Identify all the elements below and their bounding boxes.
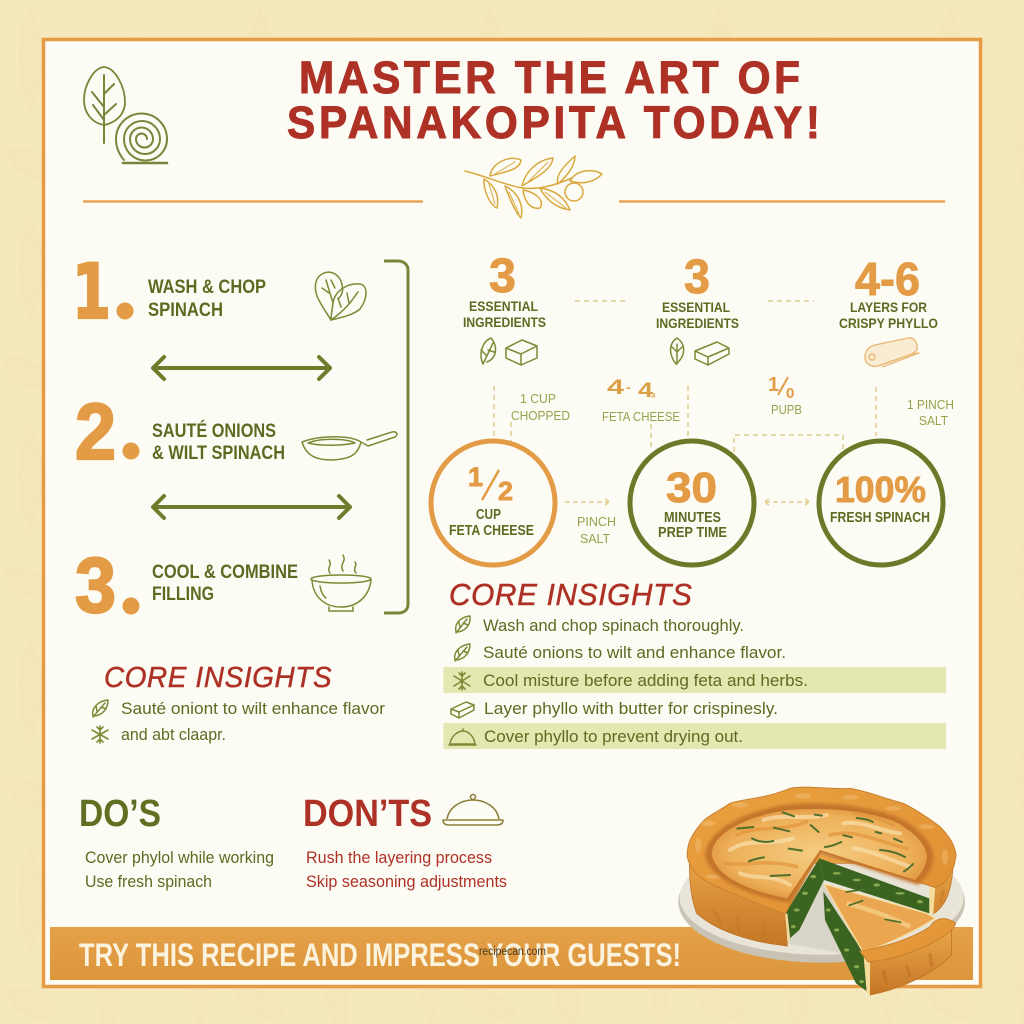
stat: 3 essential ingredients second <box>656 251 739 331</box>
heading: DON’TS <box>303 793 432 835</box>
icon: serving cloche <box>443 794 503 825</box>
insight text: and abt claapr. <box>121 725 226 744</box>
step 1: SPINACH <box>148 300 223 321</box>
stat: 4-6 layers: 4-6 <box>855 253 920 305</box>
insight icons <box>92 700 108 743</box>
arrow: step 2 to 3 <box>153 496 350 518</box>
step 1 <box>72 247 266 336</box>
pie body <box>689 853 953 946</box>
insight list: Layer phyllo with butter for crispinesly. <box>484 699 778 718</box>
garbled fraction label: - <box>626 379 631 395</box>
stat: 3 essential ingredients: 3 <box>489 250 516 303</box>
illustration: spanakopita pie <box>678 787 965 995</box>
insight list <box>483 616 808 746</box>
odd fraction label: 1 <box>768 374 779 396</box>
insight list: Sauté onions to wilt and enhance flavor. <box>483 643 786 662</box>
icon: spinach leaf and phyllo roll <box>84 67 167 163</box>
circle: 100 percent fresh spinach: FRESH SPINACH <box>830 510 930 526</box>
arrow: dashed right <box>565 499 610 505</box>
pie top surface <box>705 803 933 903</box>
garbled fraction label: 4 <box>607 376 624 399</box>
panel: stats <box>463 250 938 367</box>
circle: 100 percent fresh spinach <box>819 441 943 565</box>
step 3: 3 <box>75 541 116 629</box>
step 3 <box>75 541 298 629</box>
circle: 30 minutes: 30 <box>666 464 717 512</box>
panel: do's <box>79 793 274 891</box>
step 2: & WILT SPINACH <box>152 443 285 464</box>
arrow: dashed double <box>764 499 810 505</box>
stat: 4-6 layers <box>839 253 938 331</box>
list <box>306 849 507 891</box>
cut slice <box>823 884 956 995</box>
stat: 3 essential ingredients second: INGREDIENTS <box>656 315 739 331</box>
stat: 4-6 layers: CRISPY PHYLLO <box>839 315 938 331</box>
insight icons <box>449 616 476 745</box>
circle: 30 minutes: MINUTES <box>664 510 721 526</box>
watermark: recipecan.com <box>479 946 546 958</box>
step 2: SAUTÉ ONIONS <box>152 420 276 442</box>
bracket <box>384 261 408 613</box>
small ingredient labels: CHOPPED <box>511 408 570 423</box>
small ingredient labels: PUPB <box>771 402 802 417</box>
stat: 3 essential ingredients second: 3 <box>684 251 710 304</box>
panel: core insights right <box>444 577 946 749</box>
circle: half cup feta: CUP <box>476 507 501 523</box>
list: Skip seasoning adjustments <box>306 873 507 891</box>
plate <box>678 840 965 963</box>
garbled fraction label: ₃ <box>650 385 656 400</box>
stat: 3 essential ingredients <box>463 250 546 330</box>
banner <box>50 927 973 980</box>
highlight row 2 <box>444 723 946 749</box>
garbled fraction label <box>607 376 656 402</box>
step 1: WASH & CHOP <box>148 277 266 298</box>
icon: steaming bowl <box>311 555 371 611</box>
title <box>287 53 820 148</box>
title: SPANAKOPITA TODAY! <box>287 98 820 148</box>
circle: half cup feta: 2 <box>498 476 513 506</box>
insight text <box>121 699 385 744</box>
garbled fraction label: 4 <box>638 379 653 402</box>
small ingredient labels: 1 PINCH <box>907 397 954 412</box>
heading: CORE INSIGHTS <box>449 577 692 612</box>
icon: leaf and cheese slab <box>670 338 729 365</box>
small ingredient labels: SALT <box>580 531 610 546</box>
panel: don'ts <box>303 793 507 891</box>
step 2: 2 <box>75 387 116 476</box>
step 3: COOL & COMBINE <box>152 562 298 583</box>
circle: 30 minutes: PREP TIME <box>658 525 727 541</box>
step 2 <box>75 387 285 476</box>
insight list: Cool misture before adding feta and herbs. <box>483 671 808 690</box>
dashed connectors <box>494 301 876 452</box>
small ingredient labels: 1 CUP <box>520 391 556 406</box>
step 1: 1 <box>72 247 111 336</box>
heading: DO’S <box>79 793 161 835</box>
list: Cover phylol while working <box>85 849 274 867</box>
banner text: TRY THIS RECIPE AND IMPRESS YOUR GUESTS! <box>79 937 681 973</box>
list: Rush the layering process <box>306 849 492 867</box>
stat: 3 essential ingredients second: ESSENTIAL <box>662 299 730 315</box>
insight text: Sauté oniont to wilt enhance flavor <box>121 699 385 718</box>
stat: 3 essential ingredients: ESSENTIAL <box>469 298 538 314</box>
icon: phyllo roll <box>865 338 919 367</box>
small ingredient labels: FETA CHEESE <box>602 409 680 424</box>
title: MASTER THE ART OF <box>299 53 800 103</box>
small ingredient labels <box>511 391 954 546</box>
highlight row 1 <box>444 667 946 693</box>
small ingredient labels: PINCH <box>577 514 616 529</box>
step 3: FILLING <box>152 584 214 605</box>
spinach filling walls <box>785 858 935 946</box>
insight list: Wash and chop spinach thoroughly. <box>483 616 744 635</box>
crust rim <box>687 787 956 914</box>
arrow: step 1 to 2 <box>153 357 330 379</box>
odd fraction label <box>768 374 794 402</box>
icon: frying pan <box>302 432 397 460</box>
small ingredient labels: SALT <box>919 413 948 428</box>
icon: spinach leaves <box>315 272 366 320</box>
insight list: Cover phyllo to prevent drying out. <box>484 727 743 746</box>
icon: leaf and feta block <box>481 338 537 365</box>
circle: 30 minutes <box>630 441 754 565</box>
odd fraction label: 0 <box>786 385 794 402</box>
panel: steps <box>72 247 397 629</box>
stat: 3 essential ingredients: INGREDIENTS <box>463 314 546 330</box>
heading: CORE INSIGHTS <box>104 661 332 694</box>
circle: half cup feta: 1 <box>468 462 483 492</box>
circle: half cup feta: FETA CHEESE <box>449 523 534 539</box>
stat: 4-6 layers: LAYERS FOR <box>850 299 927 315</box>
title divider lines <box>83 200 945 203</box>
circle: 100 percent fresh spinach: 100% <box>835 469 926 510</box>
icon: golden sprig <box>465 156 602 218</box>
circle: half cup feta <box>431 441 555 565</box>
list: Use fresh spinach <box>85 873 212 891</box>
panel: core insights left <box>92 661 385 744</box>
list <box>85 849 274 891</box>
